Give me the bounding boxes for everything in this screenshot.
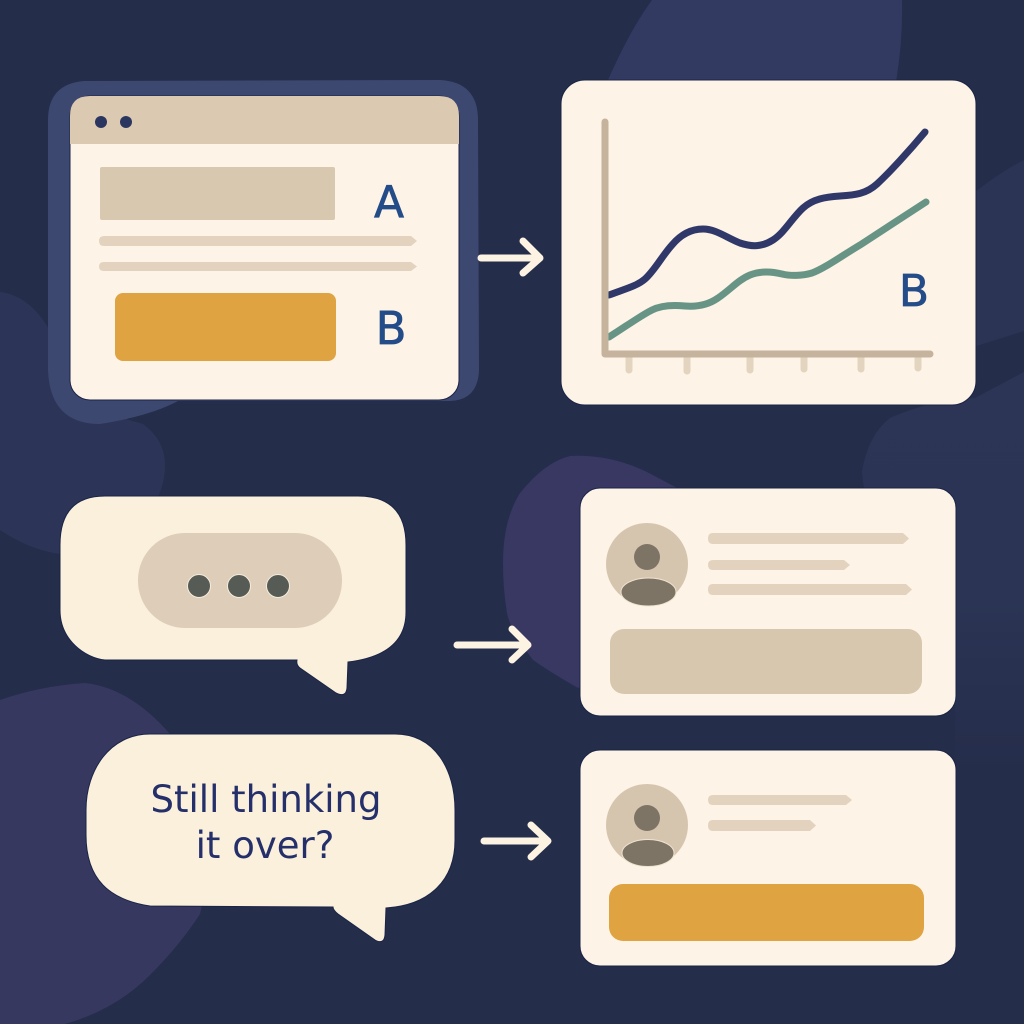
avatar xyxy=(606,523,688,606)
label B: B xyxy=(899,266,929,317)
arrow: page to chart xyxy=(481,241,540,273)
arrow: question to profile card xyxy=(484,825,548,857)
neutral button xyxy=(610,629,922,694)
text lines xyxy=(708,795,852,831)
typing pill xyxy=(138,533,342,628)
browser title bar xyxy=(70,96,459,144)
speech bubble: typing xyxy=(60,496,406,695)
chart axes xyxy=(605,122,930,354)
arrow: typing to profile card xyxy=(457,629,528,660)
panel: line chart xyxy=(561,80,976,405)
question text: it over? xyxy=(196,824,334,867)
text lines xyxy=(708,533,912,595)
speech bubble: question xyxy=(86,734,455,942)
label A: A xyxy=(374,177,404,228)
question text: Still thinking xyxy=(151,778,381,821)
series green line xyxy=(609,202,926,337)
variant B button xyxy=(115,293,336,361)
series navy line xyxy=(609,132,925,295)
variant A block xyxy=(100,167,335,220)
text lines xyxy=(99,236,417,271)
avatar xyxy=(606,784,688,866)
chart ticks xyxy=(629,356,918,371)
orange button xyxy=(609,884,924,941)
typing dots xyxy=(188,574,290,598)
panel: A/B test page mockup xyxy=(48,80,479,424)
browser dots xyxy=(95,116,132,128)
profile card: neutral xyxy=(580,488,956,716)
profile card: converted xyxy=(580,750,956,966)
label B: B xyxy=(376,302,406,355)
